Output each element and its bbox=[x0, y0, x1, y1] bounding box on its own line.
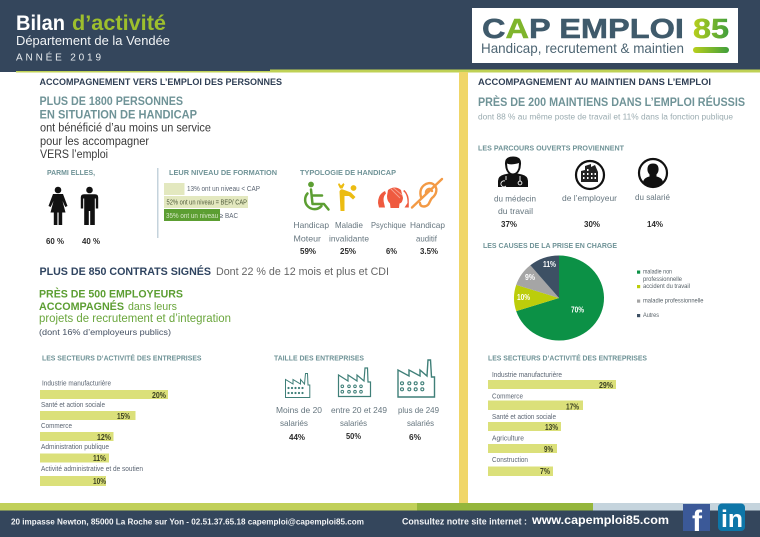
typologie de handicap: TYPOLOGIE DE HANDICAP bbox=[300, 168, 396, 177]
bar chart: secteurs right: 13% bbox=[545, 422, 558, 432]
key figure: 1800 personnes bbox=[40, 94, 211, 161]
contact details: 20 impasse Newton, 85000 La Roche sur Yon - 02.51.37.65.18 capemploi@capemploi85.com bbox=[11, 517, 364, 527]
taille des entreprises: plus de 249 bbox=[398, 405, 439, 415]
website bbox=[402, 513, 669, 528]
pie chart: causes: 9% bbox=[525, 273, 535, 282]
icon: psychic bbox=[378, 188, 409, 208]
key figure: 1800 personnes: PLUS DE 1800 PERSONNES bbox=[40, 94, 183, 108]
section heading right: ACCOMPAGNEMENT AU MAINTIEN DANS L’EMPLOI bbox=[478, 77, 711, 88]
icon: medium factory bbox=[338, 368, 370, 396]
legend: accident du travail bbox=[643, 284, 690, 290]
key figure: 1800 personnes: VERS l’emploi bbox=[40, 149, 108, 161]
les parcours ouverts bbox=[478, 144, 670, 229]
bar chart: secteurs right: 17% bbox=[566, 402, 579, 412]
typologie de handicap: Handicap bbox=[410, 220, 445, 230]
key figure: 1800 personnes: pour les accompagner bbox=[40, 136, 149, 148]
section heading left: ACCOMPAGNEMENT VERS L’EMPLOI DES PERSONNES bbox=[40, 77, 282, 88]
panel: accompagnement au maintien bbox=[478, 77, 745, 476]
title: Département de la Vendée bbox=[16, 33, 170, 48]
taille des entreprises: 50% bbox=[346, 431, 361, 441]
pie chart: causes: 10% bbox=[517, 293, 530, 302]
logo: Cap Emploi 85: 85 bbox=[693, 13, 729, 44]
les parcours ouverts: de l’employeur bbox=[562, 193, 617, 203]
yellow column divider bbox=[459, 72, 468, 503]
pie chart: causes: LES CAUSES DE LA PRISE EN CHARGE bbox=[483, 241, 617, 250]
title: ANNÉE 2019 bbox=[16, 50, 101, 64]
legend bbox=[637, 270, 704, 319]
pie chart: causes: 11% bbox=[543, 260, 556, 269]
legend: maladie professionnelle bbox=[643, 298, 704, 304]
icon: linkedin: in bbox=[721, 506, 743, 533]
taille des entreprises: 6% bbox=[409, 432, 421, 442]
header band bbox=[0, 0, 760, 72]
key figure: 850 contrats bbox=[40, 265, 389, 278]
icon: large factory bbox=[398, 360, 434, 397]
legend: professionnelle bbox=[643, 277, 683, 283]
typologie de handicap: Handicap bbox=[294, 220, 329, 230]
icon: hearing bbox=[412, 179, 442, 208]
bar chart: secteurs right: Construction bbox=[492, 455, 528, 464]
les parcours ouverts: du médecin bbox=[494, 194, 536, 204]
bar chart: secteurs left: 15% bbox=[117, 411, 130, 421]
bar chart: secteurs right: Agriculture bbox=[492, 434, 524, 443]
parmi elles: gender split: PARMI ELLES, bbox=[47, 168, 95, 177]
icon: wheelchair bbox=[305, 182, 328, 210]
typologie de handicap: 25% bbox=[340, 246, 356, 256]
website: Consultez notre site internet : bbox=[402, 517, 527, 528]
key figure: 850 contrats: Dont 22 % de 12 mois et plus et CDI bbox=[216, 266, 389, 278]
chart: niveau de formation bbox=[164, 168, 277, 221]
typologie de handicap: 6% bbox=[386, 246, 397, 256]
bar chart: secteurs left: Activité administrative et de soutien bbox=[41, 464, 143, 473]
les parcours ouverts: 30% bbox=[584, 219, 600, 229]
typologie de handicap: Moteur bbox=[294, 234, 321, 244]
bar chart: secteurs right: LES SECTEURS D’ACTIVITÉ DES ENTREPRISES bbox=[488, 354, 647, 362]
typologie de handicap: invalidante bbox=[329, 234, 369, 244]
chart: niveau de formation: 13% ont un niveau < CAP bbox=[187, 186, 260, 193]
icon: facebook bbox=[683, 504, 710, 537]
bar chart: secteurs left: Commerce bbox=[41, 421, 72, 430]
taille des entreprises: salariés bbox=[340, 418, 367, 428]
key figure: 500 employeurs bbox=[39, 288, 231, 337]
icon: woman bbox=[48, 187, 68, 225]
icon: employer bbox=[576, 161, 604, 189]
taille des entreprises: entre 20 et 249 bbox=[331, 405, 387, 415]
key figure: 500 employeurs: dans leurs bbox=[128, 301, 177, 313]
taille des entreprises: 44% bbox=[289, 432, 305, 442]
bar chart: secteurs right: 9% bbox=[544, 444, 553, 454]
title: d’activité bbox=[72, 12, 166, 35]
les parcours ouverts: 37% bbox=[501, 219, 517, 229]
taille des entreprises: Moins de 20 bbox=[276, 405, 322, 415]
parmi elles: gender split: 60 % bbox=[46, 236, 64, 246]
key figure: 500 employeurs: PRÈS DE 500 EMPLOYEURS bbox=[39, 288, 183, 301]
bar chart: secteurs left: 11% bbox=[93, 453, 106, 463]
key figure: 200 maintiens: dont 88 % au même poste de travail et 11% dans la fonction publique bbox=[478, 112, 734, 122]
key figure: 1800 personnes: EN SITUATION DE HANDICAP bbox=[40, 108, 197, 122]
bar chart: secteurs right: Santé et action sociale bbox=[492, 412, 556, 421]
key figure: 1800 personnes: ont bénéficié d’au moins un service bbox=[40, 122, 211, 134]
bar chart: secteurs right: 7% bbox=[540, 466, 550, 476]
footer bbox=[0, 503, 760, 537]
les parcours ouverts: 14% bbox=[647, 219, 663, 229]
bar chart: secteurs right: Commerce bbox=[492, 392, 523, 400]
bar chart: secteurs left: Administration publique bbox=[41, 442, 109, 451]
logo: Cap Emploi 85: CAP EMPLOI bbox=[482, 13, 684, 44]
icon: invalid illness bbox=[338, 183, 356, 211]
key figure: 500 employeurs: (dont 16% d’employeurs publics) bbox=[39, 327, 171, 337]
bar chart: secteurs left: Industrie manufacturière bbox=[42, 378, 111, 388]
bar chart: secteurs right bbox=[488, 354, 647, 476]
key figure: 850 contrats: PLUS DE 850 CONTRATS SIGNÉS bbox=[40, 265, 211, 278]
les parcours ouverts: du salarié bbox=[635, 192, 670, 202]
key figure: 500 employeurs: projets de recrutement et d’integration bbox=[39, 313, 231, 325]
typologie de handicap: Psychique bbox=[371, 220, 406, 230]
typologie de handicap: 59% bbox=[300, 246, 316, 256]
parmi elles: gender split bbox=[46, 168, 100, 246]
taille des entreprises: salariés bbox=[280, 418, 308, 428]
logo: Cap Emploi 85 bbox=[472, 8, 738, 63]
chart: niveau de formation: 35% ont un niveau ≥ BAC bbox=[166, 213, 238, 220]
parmi elles: gender split: 40 % bbox=[82, 236, 100, 246]
legend: maladie non bbox=[643, 270, 672, 276]
icon: small factory bbox=[286, 374, 310, 398]
key figure: 200 maintiens bbox=[478, 94, 745, 122]
icon: employee bbox=[639, 159, 667, 187]
key figure: 500 employeurs: ACCOMPAGNÉS bbox=[39, 300, 124, 313]
bar chart: secteurs right: Industrie manufacturière bbox=[492, 370, 562, 379]
pie chart: causes bbox=[483, 241, 704, 340]
les parcours ouverts: du travail bbox=[498, 206, 533, 216]
bar chart: secteurs left: Santé et action sociale bbox=[41, 400, 105, 409]
les parcours ouverts: LES PARCOURS OUVERTS PROVIENNENT bbox=[478, 144, 624, 152]
taille des entreprises bbox=[274, 354, 439, 442]
typologie de handicap bbox=[294, 168, 445, 256]
typologie de handicap: Maladie bbox=[335, 220, 363, 230]
bar chart: secteurs left: LES SECTEURS D’ACTIVITÉ DES ENTREPRISES bbox=[42, 354, 202, 362]
taille des entreprises: salariés bbox=[407, 418, 434, 428]
icon: doctor bbox=[498, 156, 528, 187]
typologie de handicap: 3.5% bbox=[420, 246, 438, 256]
taille des entreprises: TAILLE DES ENTREPRISES bbox=[274, 354, 364, 362]
bar chart: secteurs left bbox=[40, 354, 202, 486]
title bbox=[16, 12, 170, 64]
panel: accompagnement vers l'emploi bbox=[39, 77, 445, 486]
bar chart: secteurs left: 12% bbox=[97, 432, 111, 442]
typologie de handicap: auditif bbox=[416, 234, 438, 244]
logo: Cap Emploi 85: Handicap, recrutement & maintien bbox=[481, 40, 684, 56]
chart: niveau de formation: 52% ont un niveau = BEP/ CAP bbox=[166, 200, 247, 206]
bar chart: secteurs left: 20% bbox=[152, 390, 166, 400]
legend: Autres bbox=[643, 313, 659, 319]
icon: man bbox=[81, 187, 98, 225]
bar chart: secteurs right: 29% bbox=[599, 380, 613, 390]
title: Bilan bbox=[16, 12, 65, 35]
bar chart: secteurs left: 10% bbox=[93, 476, 106, 486]
chart: niveau de formation: LEUR NIVEAU DE FORMATION bbox=[169, 168, 277, 177]
pie chart: causes: 70% bbox=[571, 306, 584, 315]
website: www.capemploi85.com bbox=[531, 513, 669, 527]
